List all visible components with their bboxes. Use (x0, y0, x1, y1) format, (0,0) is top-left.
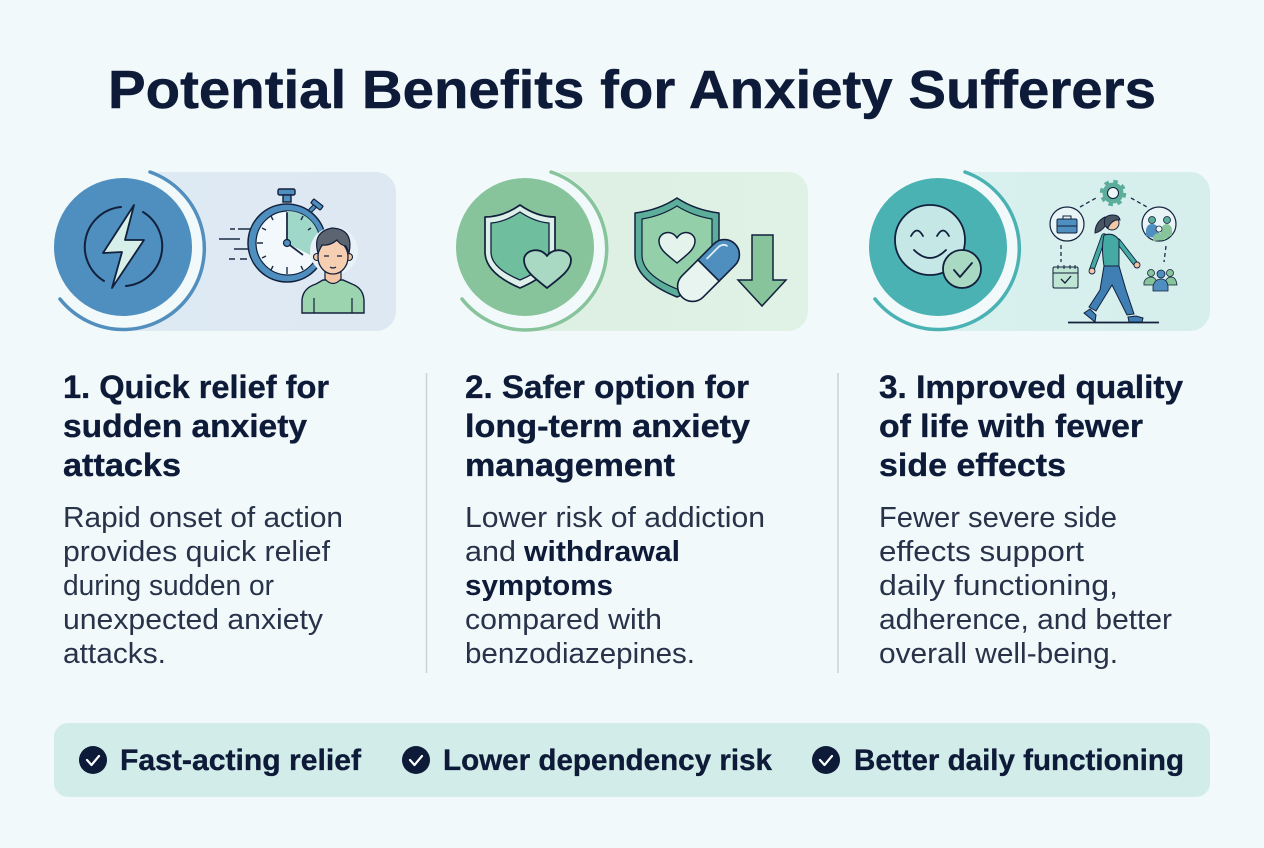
icon: check 2 (402, 746, 430, 774)
heading 3 (879, 369, 1183, 483)
body 1: attacks. (63, 638, 166, 670)
icon: gear (1102, 182, 1124, 204)
body 2: and (465, 536, 516, 568)
title: Potential Benefits for Anxiety Sufferers (108, 60, 1156, 120)
body 1: unexpected anxiety (63, 604, 324, 636)
icon: daily life network (1050, 182, 1177, 322)
body 2 (465, 502, 765, 670)
heading 2 (465, 369, 750, 483)
heading 2: 2. Safer option for (465, 369, 749, 405)
icon: shield with heart (635, 198, 719, 297)
text column 2 (465, 369, 765, 670)
icon: lightning circle (54, 172, 204, 329)
icon: calm person (302, 227, 364, 313)
icon: smiley circle (869, 172, 1019, 329)
icon: capsule (671, 233, 746, 308)
body 3: daily functioning, (879, 570, 1118, 602)
body 2: benzodiazepines. (465, 638, 695, 670)
body 2: symptoms (465, 570, 613, 602)
icon: stopwatch (219, 189, 326, 282)
body 1 (63, 502, 343, 670)
icon: check 1 (79, 746, 107, 774)
body 2: compared with (465, 604, 662, 636)
body 2: Lower risk of addiction (465, 502, 765, 534)
body 1: Rapid onset of action (63, 502, 343, 534)
icon: calendar (1053, 265, 1078, 288)
heading 1: attacks (63, 447, 181, 483)
heading 3: 3. Improved quality (879, 369, 1183, 405)
icon: briefcase (1050, 207, 1084, 241)
panel: quality of life illustration (855, 165, 1210, 331)
icon: check 3 (812, 746, 840, 774)
body 2: withdrawal (523, 536, 680, 568)
heading 1: sudden anxiety (63, 408, 307, 444)
divider left (426, 373, 428, 673)
label: fast-acting relief: Fast-acting relief (120, 744, 362, 777)
body 3: Fewer severe side (879, 502, 1117, 534)
panel background (110, 172, 396, 331)
icon: group (1144, 270, 1177, 291)
text column 3 (879, 369, 1183, 670)
body 3: effects support (879, 536, 1084, 568)
panel background (925, 172, 1210, 331)
body 3: adherence, and better (879, 604, 1172, 636)
icon: people circle (1142, 207, 1176, 241)
heading 2: management (465, 447, 675, 483)
panel background (512, 172, 808, 331)
summary bar (54, 723, 1210, 797)
heading 2: long-term anxiety (465, 408, 750, 444)
heading 1 (63, 369, 329, 483)
heading 1: 1. Quick relief for (63, 369, 329, 405)
body 3 (879, 502, 1172, 670)
icon: down arrow (738, 235, 786, 306)
label: better daily functioning: Better daily functioning (854, 744, 1184, 777)
panel: quick relief illustration (40, 165, 396, 331)
icon: walking woman (1068, 215, 1159, 322)
body 1: during sudden or (63, 570, 274, 602)
heading 3: side effects (879, 447, 1066, 483)
body 1: provides quick relief (63, 536, 331, 568)
body 3: overall well-being. (879, 638, 1118, 670)
label: lower dependency risk: Lower dependency risk (443, 744, 772, 777)
text column 1 (63, 369, 343, 670)
panel: safer option illustration (442, 165, 808, 331)
heading 3: of life with fewer (879, 408, 1143, 444)
divider right (837, 373, 839, 673)
icon: shield heart circle (456, 172, 607, 330)
